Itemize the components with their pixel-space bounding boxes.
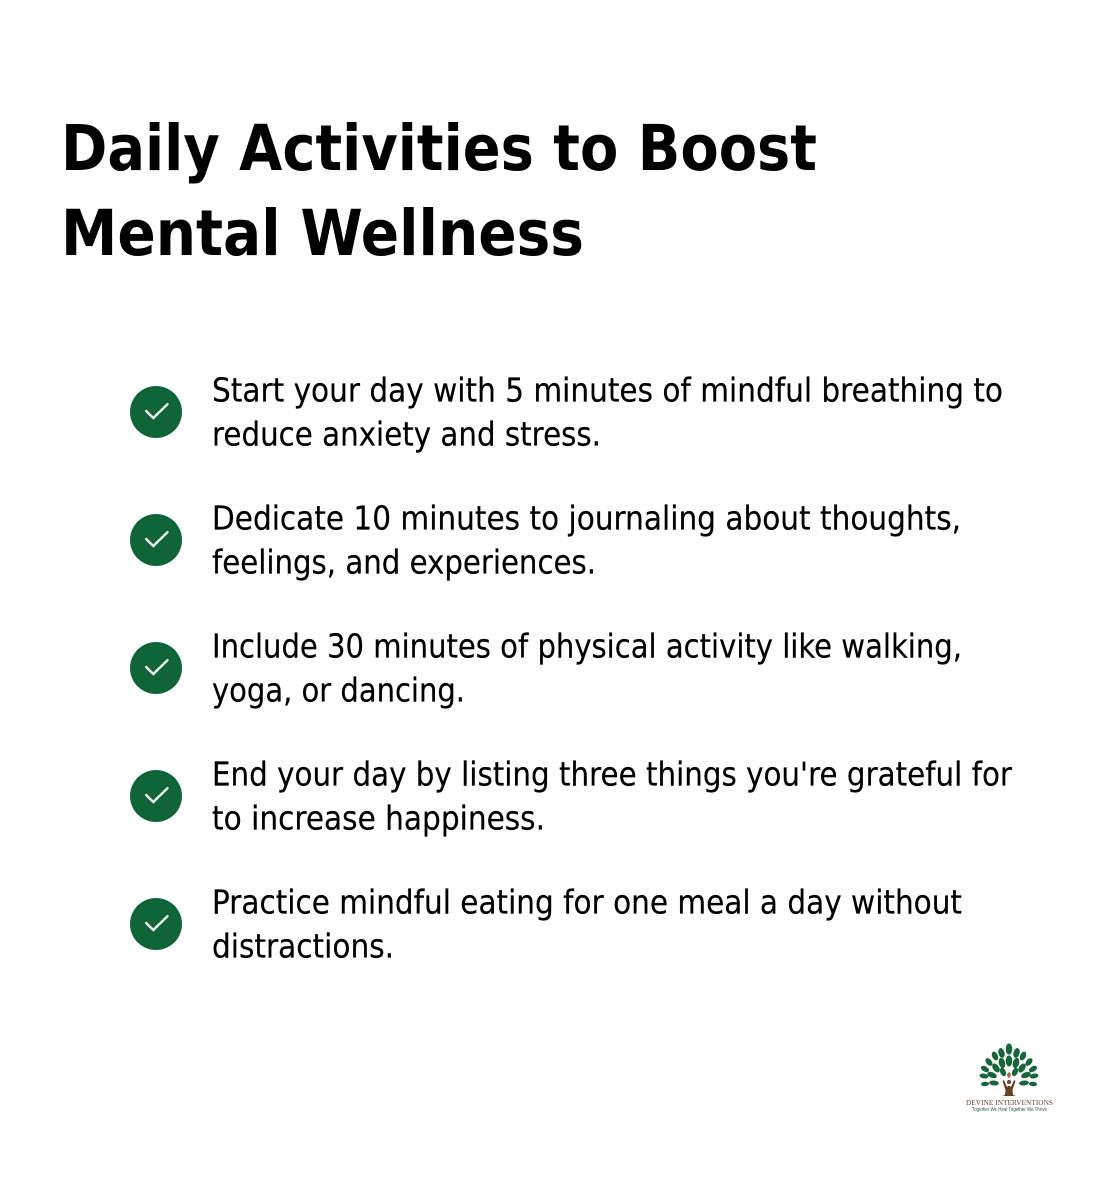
- icon: check mark: [130, 642, 182, 694]
- item 2 text: Dedicate 10 minutes to journaling about thoughts,: [212, 500, 961, 538]
- title: Mental Wellness: [61, 197, 584, 270]
- list item 5: [130, 884, 962, 966]
- icon: check mark: [130, 386, 182, 438]
- list item 2: [130, 500, 961, 582]
- logo: Devine Interventions: [966, 1044, 1053, 1113]
- icon: tree leaves: [980, 1044, 1038, 1086]
- list item 3: [130, 628, 962, 710]
- item 5 text: [212, 884, 962, 966]
- icon: check mark: [130, 514, 182, 566]
- item 2 text: feelings, and experiences.: [212, 544, 596, 582]
- item 1 text: reduce anxiety and stress.: [212, 416, 601, 454]
- icon: tree figure: [1002, 1072, 1016, 1096]
- item 4 text: to increase happiness.: [212, 800, 545, 838]
- checklist: [130, 372, 1013, 966]
- icon: check mark: [130, 898, 182, 950]
- item 2 text: [212, 500, 961, 582]
- item 5 text: Practice mindful eating for one meal a day without: [212, 884, 962, 922]
- logo name: DEVINE INTERVENTIONS: [966, 1098, 1053, 1107]
- item 1 text: Start your day with 5 minutes of mindful breathing to: [212, 372, 1003, 410]
- item 5 text: distractions.: [212, 928, 394, 966]
- title: Daily Activities to Boost: [61, 112, 817, 185]
- icon: check mark: [130, 770, 182, 822]
- item 4 text: [212, 756, 1013, 838]
- list item 1: [130, 372, 1003, 454]
- item 3 text: yoga, or dancing.: [212, 672, 465, 710]
- item 1 text: [212, 372, 1003, 454]
- item 4 text: End your day by listing three things you're grateful for: [212, 756, 1013, 794]
- logo tagline: Together We Heal Together We Thrive: [972, 1107, 1047, 1113]
- title: [61, 112, 817, 270]
- list item 4: [130, 756, 1013, 838]
- item 3 text: [212, 628, 962, 710]
- item 3 text: Include 30 minutes of physical activity like walking,: [212, 628, 962, 666]
